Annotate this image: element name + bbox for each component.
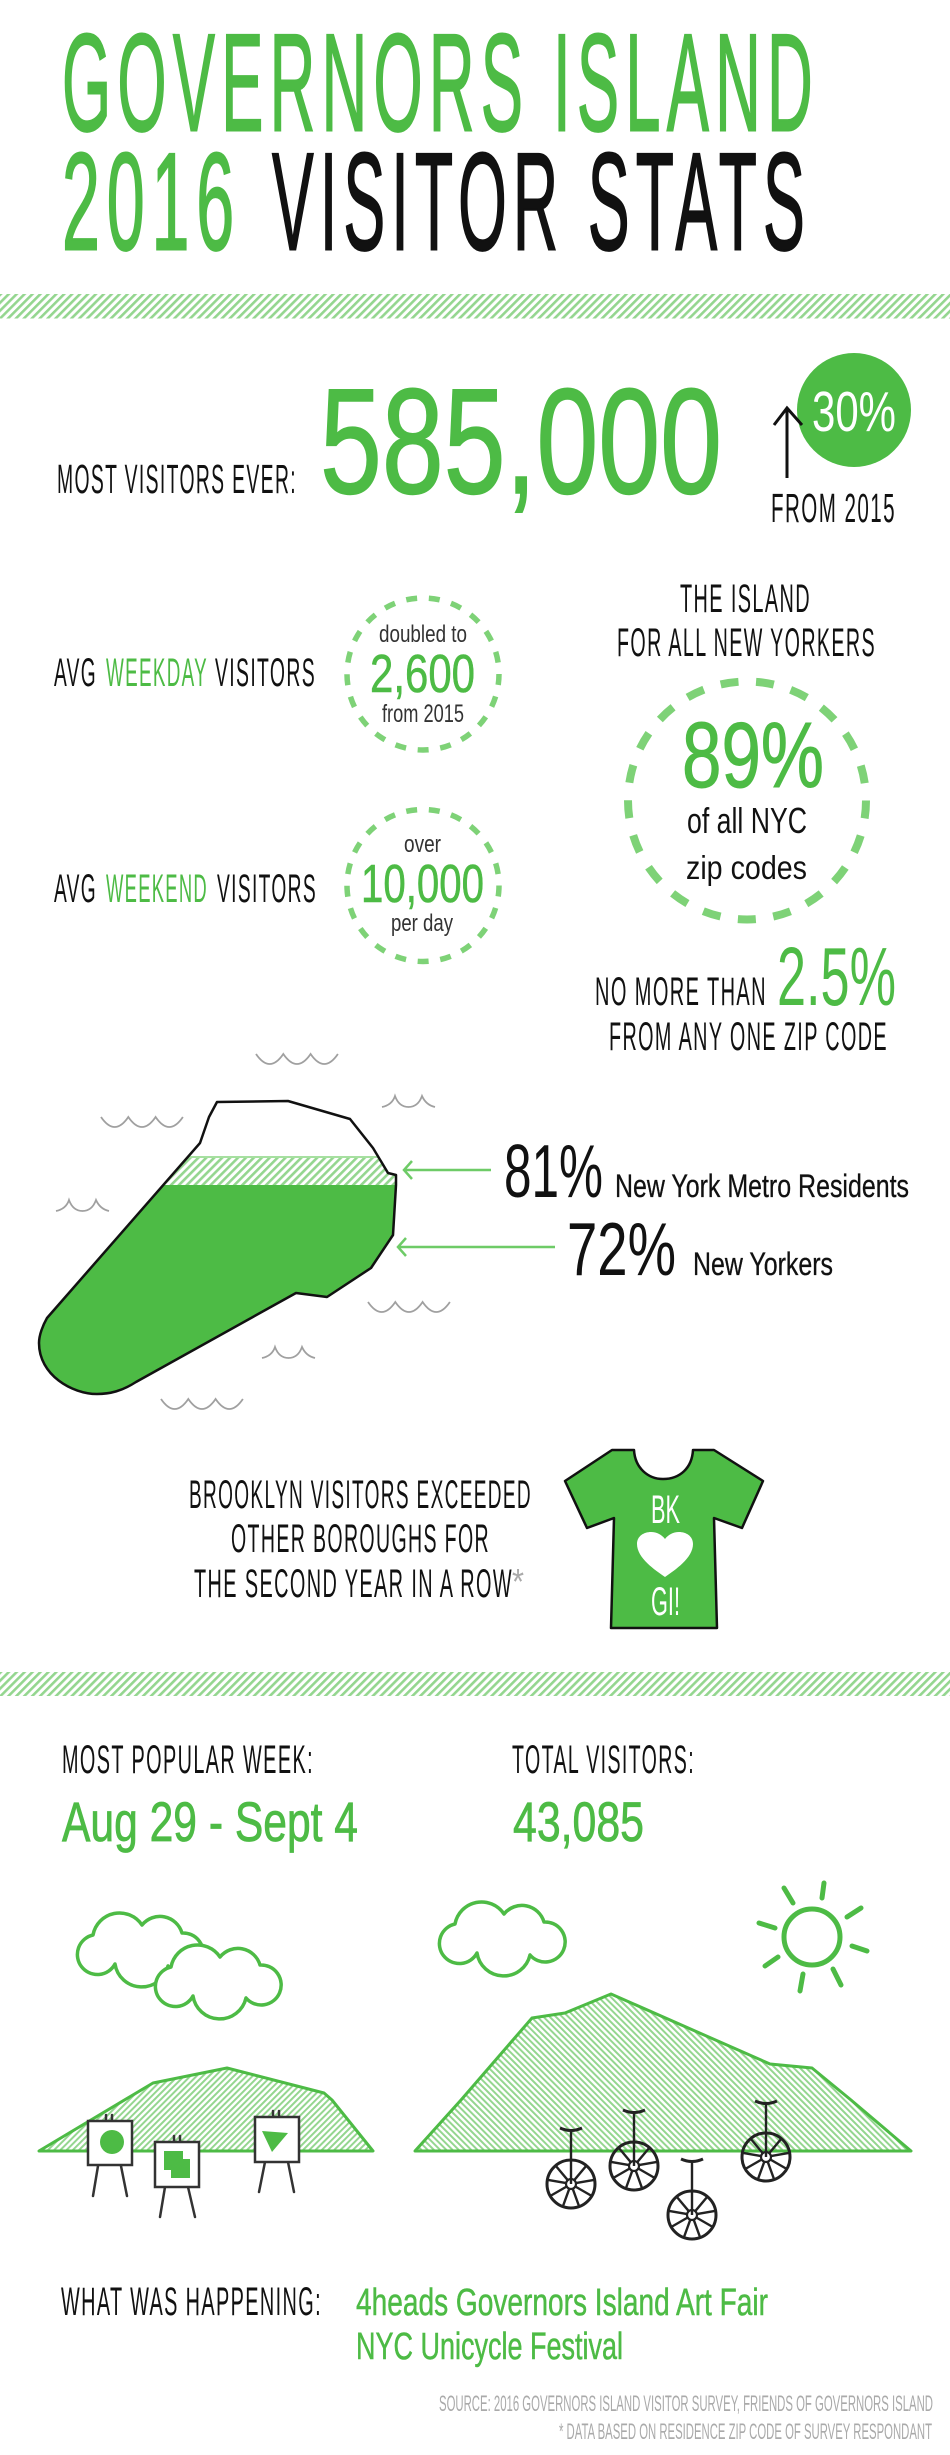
- dashed circle: 2,600: 2,600: [370, 644, 475, 704]
- title: [62, 6, 819, 280]
- panel: total visitors: MOST VISITORS EVER:: [57, 456, 297, 502]
- text block: THE SECOND YEAR IN A ROW: [194, 1562, 513, 1606]
- dashed circle: 89 percent: of all NYC: [687, 800, 807, 841]
- icon: cloud right: [439, 1902, 565, 1976]
- heading: [617, 577, 876, 665]
- icon: sun: [759, 1883, 867, 1991]
- arrow: up: [774, 408, 802, 478]
- label: avg weekend visitors: WEEKEND: [106, 867, 208, 911]
- text block: *: [512, 1561, 524, 1602]
- icon: easel with squares: [155, 2136, 199, 2217]
- icon: t-shirt: GI!: [651, 1580, 680, 1624]
- panel: weekday visitors: [54, 598, 499, 750]
- panel: weekend visitors: VISITORS: [217, 867, 317, 911]
- heading: THE ISLAND: [680, 577, 811, 621]
- dashed circle: 89 percent: [628, 682, 866, 920]
- title: 2016: [62, 124, 241, 280]
- panel: brooklyn visitors: [189, 1450, 763, 1628]
- panel: most popular week: [62, 1738, 695, 1853]
- dashed circle: 89 percent: zip codes: [686, 849, 807, 886]
- icon: unicycle 1: [547, 2128, 595, 2208]
- event: unicycle festival: NYC Unicycle Festival: [356, 2326, 623, 2368]
- stat: 72 percent new yorkers: [567, 1207, 833, 1291]
- striped divider: [0, 1672, 950, 1696]
- stat: 72 percent new yorkers: New Yorkers: [693, 1246, 833, 1282]
- panel: total visitors: [57, 353, 911, 531]
- panel: island for all new yorkers: [595, 577, 896, 1059]
- stat: 72 percent new yorkers: 72%: [567, 1207, 676, 1291]
- badge: 30 percent: 30%: [812, 380, 896, 444]
- dashed circle: 89 percent: 89%: [682, 703, 824, 807]
- value: total visitors: 43,085: [513, 1790, 644, 1853]
- arrow: 72 percent: [398, 1238, 555, 1256]
- dashed circle: 10,000: 10,000: [361, 854, 484, 914]
- panel: what was happening: [61, 2280, 768, 2368]
- badge: 30 percent: [797, 353, 911, 467]
- panel: weekend visitors: [54, 810, 499, 962]
- text: TOTAL VISITORS:: [512, 1738, 695, 1782]
- icon: unicycle 3: [668, 2159, 716, 2239]
- striped divider: [0, 294, 950, 318]
- label: avg weekday visitors: AVG: [54, 651, 97, 695]
- value: dates: Aug 29 - Sept 4: [62, 1790, 358, 1853]
- label: avg weekend visitors: AVG: [54, 867, 97, 911]
- dashed circle: 2,600: from 2015: [382, 700, 464, 728]
- panel: most popular week: MOST POPULAR WEEK:: [62, 1738, 314, 1782]
- mountain left: [39, 2068, 373, 2151]
- icon: t-shirt: [565, 1450, 763, 1628]
- mountain right: [415, 1994, 911, 2151]
- panel: weekday visitors: VISITORS: [215, 651, 316, 695]
- dashed circle: 2,600: [347, 598, 499, 750]
- arrow: 81 percent: [404, 1161, 491, 1179]
- event: art fair: 4heads Governors Island Art Fair: [356, 2282, 768, 2324]
- waves: [56, 1054, 450, 1409]
- icon: t-shirt: BK: [651, 1488, 680, 1532]
- icon: unicycle 2: [610, 2110, 658, 2190]
- text block: [189, 1473, 532, 1606]
- icon: easel with circle: [88, 2115, 132, 2196]
- dashed circle: 2,600: doubled to: [379, 621, 467, 648]
- panel: brooklyn visitors: BROOKLYN VISITORS EXCEEDED: [189, 1473, 532, 1517]
- icon: easel with triangle: [255, 2111, 299, 2192]
- dashed circle: 10,000: over: [404, 831, 441, 858]
- text block: OTHER BOROUGHS FOR: [231, 1517, 490, 1561]
- island shape: [30, 1101, 400, 1400]
- dashed circle: 10,000: [347, 810, 499, 962]
- stat: 81 percent metro residents: 81%: [504, 1129, 603, 1213]
- big number: 585,000: [320, 357, 722, 525]
- label: avg weekday visitors: WEEKDAY: [106, 651, 208, 695]
- stat: no more than 2.5 percent: [595, 930, 896, 1059]
- stat: 81 percent metro residents: [504, 1129, 909, 1213]
- icon: unicycle 4: [742, 2101, 790, 2181]
- source notes: [439, 2391, 933, 2444]
- dashed circle: 10,000: per day: [391, 910, 453, 937]
- panel: what was happening: WHAT WAS HAPPENING:: [61, 2280, 322, 2324]
- panel: island map: [30, 1054, 909, 1409]
- stat: no more than 2.5 percent: NO MORE THAN: [595, 970, 767, 1014]
- icon: clouds left: [77, 1913, 281, 2019]
